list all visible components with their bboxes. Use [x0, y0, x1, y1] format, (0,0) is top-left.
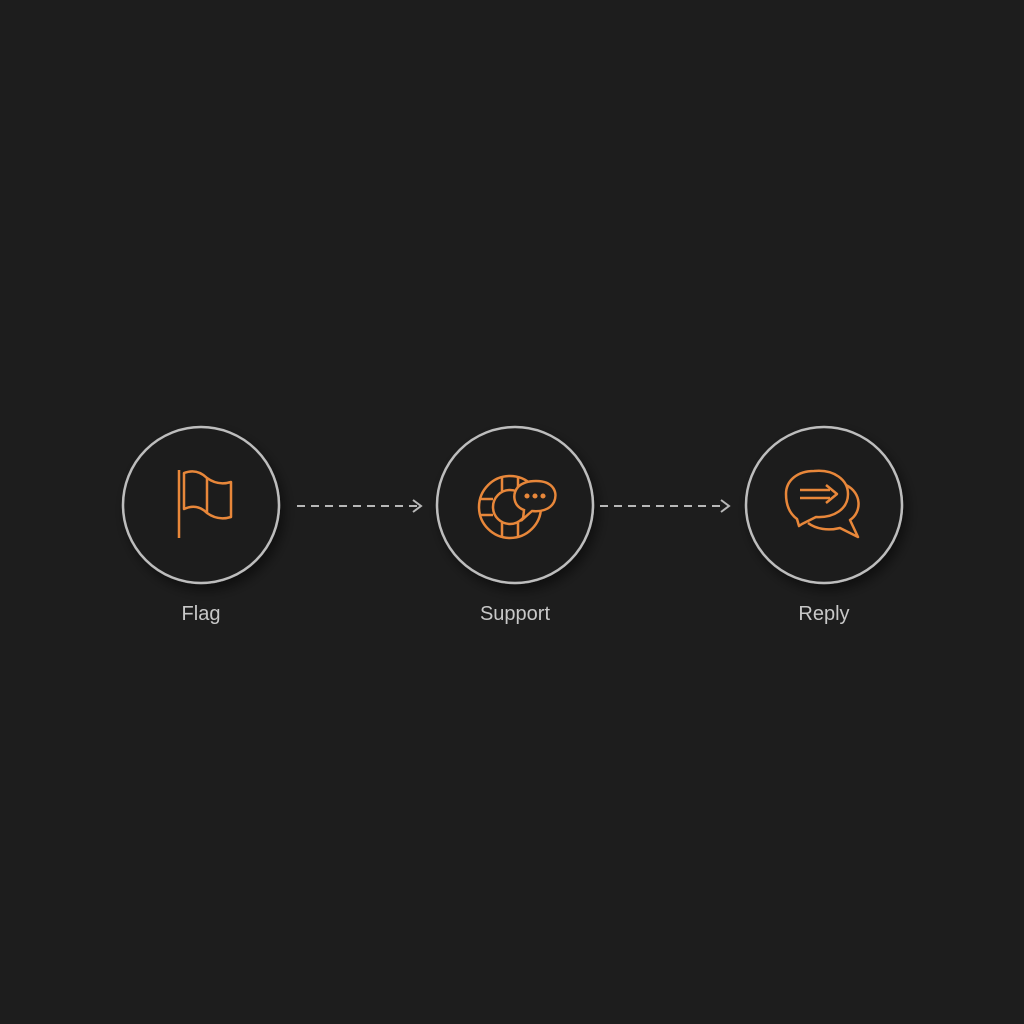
arrow: flag to support — [297, 500, 421, 512]
step circle: support — [437, 427, 593, 583]
step circle: reply — [746, 427, 902, 583]
arrow: support to reply — [600, 500, 729, 512]
icon: lifebuoy with chat — [479, 476, 555, 538]
label: Flag: Flag — [182, 603, 220, 625]
label: Reply: Reply — [798, 603, 850, 625]
icon: flag — [179, 470, 231, 538]
label: Support: Support — [480, 603, 550, 625]
icon: reply chat bubbles — [786, 471, 859, 537]
step circle: flag — [123, 427, 279, 583]
